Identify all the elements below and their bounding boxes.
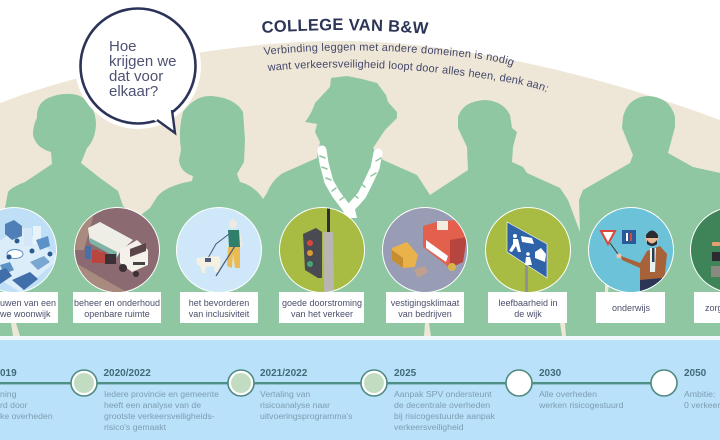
timeline line <box>0 382 664 384</box>
small beige notches at body bottoms <box>11 284 609 336</box>
circle: zorg <box>690 207 720 293</box>
circle: onderwijs <box>588 207 674 296</box>
label: nieuwe woonwijk: we woonwijk <box>0 309 51 319</box>
timeline entry 2020/2022: risico's gemaakt <box>104 422 167 432</box>
label: doorstroming: goede doorstroming <box>282 298 362 308</box>
timeline entry 2030: Alle overheden <box>539 389 597 399</box>
label: leefbaarheid: de wijk <box>514 309 542 319</box>
timeline entry 2019: ning <box>0 389 17 399</box>
label: doorstroming <box>279 292 364 323</box>
circle: doorstroming <box>279 207 365 293</box>
timeline entry 2030: werken risicogestuurd <box>538 400 624 410</box>
timeline entry 2020/2022: Iedere provincie en gemeente <box>104 389 219 399</box>
label: nieuwe woonwijk: uwen van een <box>0 298 56 308</box>
label: zorg <box>694 292 720 323</box>
timeline entry 2019: rd door <box>0 400 28 410</box>
mayoral chain <box>320 150 381 218</box>
label: onderwijs: onderwijs <box>612 303 651 313</box>
label: doorstroming: van het verkeer <box>291 309 353 319</box>
circle: nieuwe woonwijk <box>0 207 60 293</box>
intro text: want verkeersveiligheid loopt door alles heen, denk aan: <box>268 60 548 92</box>
timeline entry 2021/2022: risicoanalyse naar <box>260 400 330 410</box>
timeline entry 2030: 2030 <box>539 368 562 379</box>
timeline entry 2019: ke overheden <box>0 411 53 421</box>
circle: vestigingsklimaat <box>382 207 468 293</box>
speech bubble: Hoe <box>109 38 137 55</box>
circle: beheer en onderhoud <box>74 207 160 294</box>
timeline entry 2050: 0 verkeer <box>684 400 720 410</box>
speech bubble <box>75 3 201 133</box>
timeline entry 2025: de decentrale overheden <box>394 400 490 410</box>
timeline entry 2050: 2050 <box>684 368 707 379</box>
timeline entry 2021/2022: Vertaling van <box>260 389 310 399</box>
label: vestigingsklimaat: van bedrijven <box>398 309 452 319</box>
label: inclusiviteit <box>180 292 258 323</box>
circle: leefbaarheid <box>485 207 571 294</box>
title: COLLEGE VAN B&W <box>262 18 429 34</box>
label: beheer en onderhoud: beheer en onderhoud <box>74 298 160 308</box>
timeline entry 2025 <box>361 368 496 432</box>
timeline entry 2019 <box>0 368 53 421</box>
timeline entry 2025: verkeersveiligheid <box>394 422 464 432</box>
timeline entry 2050 <box>651 368 720 410</box>
beige arch background <box>0 41 720 336</box>
label: leefbaarheid <box>488 292 567 323</box>
timeline entry 2025: 2025 <box>394 368 417 379</box>
timeline entry 2025: bij risicogestuurde aanpak <box>394 411 496 421</box>
speech bubble: elkaar? <box>109 83 158 100</box>
label: inclusiviteit: van inclusiviteit <box>189 309 250 319</box>
label: vestigingsklimaat <box>386 292 464 323</box>
timeline entry 2021/2022 <box>228 368 353 421</box>
intro text <box>263 43 548 92</box>
timeline entry 2020/2022: 2020/2022 <box>104 368 151 379</box>
circle: inclusiviteit <box>176 207 262 293</box>
blue timeline band <box>0 336 720 341</box>
label: onderwijs <box>596 292 665 323</box>
timeline entry 2030 <box>506 368 624 410</box>
timeline entry 2025: Aanpak SPV ondersteunt <box>394 389 492 399</box>
speech bubble: dat voor <box>109 68 163 85</box>
timeline entry 2020/2022: heeft een analyse van de <box>104 400 201 410</box>
label: vestigingsklimaat: vestigingsklimaat <box>391 298 460 308</box>
label: beheer en onderhoud: openbare ruimte <box>84 309 150 319</box>
label: nieuwe woonwijk <box>0 292 58 323</box>
timeline entry 2019: 019 <box>0 368 17 379</box>
speech bubble: krijgen we <box>109 53 177 70</box>
timeline entry 2021/2022: 2021/2022 <box>260 368 308 379</box>
timeline entry 2020/2022: grootste verkeersveiligheids- <box>104 411 215 421</box>
label: beheer en onderhoud <box>73 292 161 323</box>
label: leefbaarheid: leefbaarheid in <box>498 298 558 308</box>
timeline entry 2050: Ambitie: <box>684 389 715 399</box>
timeline entry 2021/2022: uitvoeringsprogramma's <box>260 411 353 421</box>
label: inclusiviteit: het bevorderen <box>189 298 249 308</box>
timeline entry 2020/2022 <box>71 368 219 432</box>
green silhouettes of the five college members <box>0 76 720 336</box>
intro text: Verbinding leggen met andere domeinen is nodig <box>263 43 514 68</box>
